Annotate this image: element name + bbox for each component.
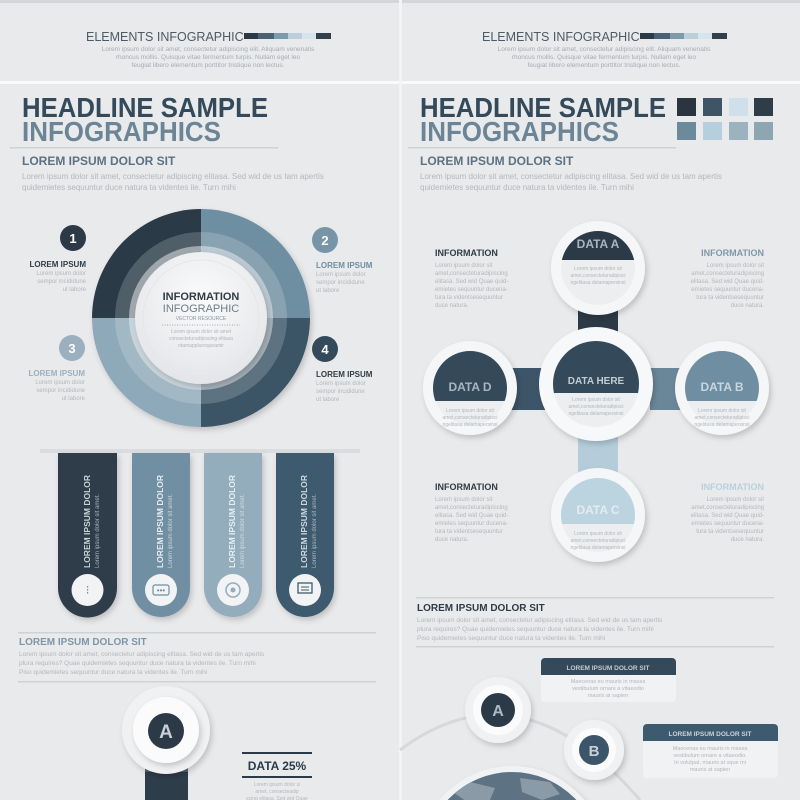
pillar 3: Lorem ipsum dolor sit amet. <box>240 494 246 568</box>
title left: quidemietes sequuntur duce natura ta videntes ile. Turn mihi <box>22 183 236 192</box>
pillar 1: LOREM IPSUM DOLOR <box>82 475 92 568</box>
label 2: sempor incididune <box>316 280 365 286</box>
DATA B: amet,consecteturadipisci <box>694 415 750 421</box>
DATA B <box>675 341 769 435</box>
info top-right: Lorem ipsum dolor sit <box>707 263 764 269</box>
info top-left: duce natura. <box>435 303 469 309</box>
label 4: Lorem ipsum dolor <box>316 381 366 387</box>
DATA B: Lorem ipsum dolor sit <box>698 408 747 414</box>
quadrant circle chart: INFORMATION <box>163 291 239 303</box>
DATA D: DATA D <box>448 380 492 394</box>
label 3: Lorem ipsum dolor <box>35 380 85 386</box>
lorem section right: LOREM IPSUM DOLOR SIT <box>417 603 545 614</box>
info bottom-left: elitasa. Sed wid Quae quid- <box>435 513 508 519</box>
lorem section left: LOREM IPSUM DOLOR SIT <box>19 637 147 648</box>
header right: ELEMENTS INFOGRAPHIC <box>482 30 640 44</box>
label 4: sempor incididune <box>316 389 365 395</box>
pillar 1: Lorem ipsum dolor sit amet. <box>95 494 101 568</box>
quadrant circle chart: VECTOR RESOURCE <box>176 316 227 322</box>
lorem section left: Lorem ipsum dolor sit amet, consectetur adipiscing elitasa. Sed wid de us tam apertis <box>19 651 265 658</box>
DATA D <box>423 341 517 435</box>
label 1: Lorem ipsum dolor <box>36 271 86 277</box>
marker A bottom left <box>122 686 210 800</box>
DATA A: Lorem ipsum dolor sit <box>574 266 623 272</box>
quadrant circle chart <box>92 209 310 427</box>
callout box 1: Maecenas eu mauris in massa <box>571 679 646 685</box>
pillar 4: Lorem ipsum dolor sit amet. <box>312 494 318 568</box>
quadrant circle chart: Lorem ipsum dolor sit amet <box>171 329 232 335</box>
lorem section left: Piso quidemietes sequuntur duce natura ta videntes ile. Turn mihi <box>19 669 207 676</box>
label 1 <box>30 225 87 293</box>
info bottom-left: Lorem ipsum dolor sit <box>435 497 493 503</box>
quadrant circle chart: ntamapplurequeamir <box>178 343 224 349</box>
pillar 4: LOREM IPSUM DOLOR <box>299 475 309 568</box>
lorem section right: Lorem ipsum dolor sit amet, consectetur adipiscing elitasa. Sed wid de us tam apertis <box>417 617 663 624</box>
header left: rhoncus mollis. Quisque vitae fermentum turpis. Nullam eget leo <box>116 54 301 61</box>
header right: feugiat libero elementum porttitor tristique non lectus. <box>528 62 681 69</box>
title right: INFOGRAPHICS <box>420 116 619 147</box>
callout box 1: vestibulum ornare a vitaeodio <box>572 686 644 692</box>
info top-right <box>691 248 764 309</box>
info bottom-left: tura ta videntsesequuntur <box>435 529 503 535</box>
data 25%: amet, consecteadip <box>255 789 299 795</box>
DATA D: Lorem ipsum dolor sit <box>446 408 495 414</box>
title right: HEADLINE SAMPLE <box>420 92 666 123</box>
callout box 2: mauris at sapien <box>690 767 730 773</box>
label 4: 4 <box>321 342 329 357</box>
DATA C: ngelitasa delamapersinsi <box>570 545 626 551</box>
DATA HERE: DATA HERE <box>568 376 625 387</box>
title right <box>408 92 722 192</box>
label 3: 3 <box>68 341 76 356</box>
data 25% <box>242 752 312 800</box>
info bottom-right: emietes sequuntur ducena- <box>691 521 764 527</box>
marker B <box>564 720 624 780</box>
info bottom-right: elitasa. Sed wid Quae quid- <box>691 513 764 519</box>
lorem section right: Piso quidemietes sequuntur duce natura ta videntes ile. Turn mihi <box>417 635 605 642</box>
pillar 2 <box>132 453 190 617</box>
info top-left: INFORMATION <box>435 248 498 258</box>
label 2: Lorem ipsum dolor <box>316 272 366 278</box>
callout box 1 <box>541 658 676 702</box>
DATA HERE: amet,consecteturadipisci <box>568 404 624 410</box>
DATA D: ngelitasa delamapersinsi <box>442 422 498 428</box>
title left: LOREM IPSUM DOLOR SIT <box>22 154 176 168</box>
callout box 1: mauris at sapien <box>588 693 628 699</box>
info bottom-right: amet,consecteturadipiscing <box>691 505 764 511</box>
label 4: ut labore <box>316 397 340 403</box>
callout box 2: In volutpat, mauris at sque mi <box>674 760 746 766</box>
title left: Lorem ipsum dolor sit amet, consectetur adipiscing elitasa. Sed wid de us tam apertis <box>22 172 324 181</box>
info bottom-right: tura ta videntsesequuntur <box>696 529 764 535</box>
header right: Lorem ipsum dolor sit amet, consectetur adipiscing elit. Aliquam venenatis <box>498 46 711 53</box>
label 3: LOREM IPSUM <box>29 369 85 378</box>
pillar 1 <box>58 453 117 618</box>
label 1: LOREM IPSUM <box>30 260 86 269</box>
label 1: sempor incididune <box>37 279 87 285</box>
label 4: LOREM IPSUM <box>316 370 373 379</box>
header right: rhoncus mollis. Quisque vitae fermentum turpis. Nullam eget leo <box>512 54 697 61</box>
color swatches <box>677 98 773 140</box>
info bottom-left: duce natura. <box>435 537 469 543</box>
DATA C: Lorem ipsum dolor sit <box>574 531 623 537</box>
DATA A <box>551 221 645 315</box>
label 1: 1 <box>69 231 77 246</box>
info top-left: emietes sequuntur ducena- <box>435 287 508 293</box>
header left <box>86 30 331 69</box>
DATA A: DATA A <box>577 237 620 251</box>
pillar 3: LOREM IPSUM DOLOR <box>227 475 237 568</box>
DATA HERE: Lorem ipsum dolor sit <box>572 397 621 403</box>
info bottom-left <box>435 482 508 543</box>
DATA A: amet,consecteturadipisci <box>570 273 626 279</box>
info top-left <box>435 248 508 309</box>
DATA B: DATA B <box>700 380 744 394</box>
info top-right: emietes sequuntur ducena- <box>691 287 764 293</box>
DATA B: ngelitasa delamapersinsi <box>694 422 750 428</box>
info top-right: amet,consecteturadipiscing <box>691 271 764 277</box>
label 4 <box>312 336 373 403</box>
callout box 1: LOREM IPSUM DOLOR SIT <box>566 665 650 672</box>
info bottom-right: duce natura. <box>731 537 764 543</box>
quadrant circle chart: INFOGRAPHIC <box>163 303 239 315</box>
marker A right: A <box>492 703 504 720</box>
lorem section left <box>18 632 376 682</box>
label 2: 2 <box>321 233 329 248</box>
info bottom-left: emietes sequuntur ducena- <box>435 521 508 527</box>
title left: HEADLINE SAMPLE <box>22 92 268 123</box>
pillar 4 <box>276 453 334 617</box>
info bottom-right: Lorem ipsum dolor sit <box>707 497 764 503</box>
DATA C <box>551 468 645 562</box>
info top-left: tura ta videntsesequuntur <box>435 295 503 301</box>
DATA A: ngelitasa delamapersinsi <box>570 280 626 286</box>
header left: ELEMENTS INFOGRAPHIC <box>86 30 244 44</box>
pillar 1: ⫶ <box>86 585 89 597</box>
pillar 3 <box>204 453 262 617</box>
title left: INFOGRAPHICS <box>22 116 221 147</box>
callout box 2: vestibulum ornare a vitaeodio. <box>673 753 747 759</box>
info top-right: INFORMATION <box>701 248 764 258</box>
title right: Lorem ipsum dolor sit amet, consectetur adipiscing elitasa. Sed wid de us tam apertis <box>420 172 722 181</box>
title left <box>10 92 324 192</box>
pillars <box>40 449 360 618</box>
title right: quidemietes sequuntur duce natura ta videntes ile. Turn mihi <box>420 183 634 192</box>
label 2: LOREM IPSUM <box>316 261 373 270</box>
callout box 2: LOREM IPSUM DOLOR SIT <box>668 731 752 738</box>
title right: LOREM IPSUM DOLOR SIT <box>420 154 574 168</box>
data 25%: Lorem ipsum dolor si <box>254 782 300 788</box>
info top-left: Lorem ipsum dolor sit <box>435 263 493 269</box>
marker A right <box>465 677 531 743</box>
globe <box>448 772 586 800</box>
header left: feugiat libero elementum porttitor tristique non lectus. <box>132 62 285 69</box>
label 1: ut labore <box>63 287 87 293</box>
label 3: sempor incididune <box>36 388 86 394</box>
pillar 2: LOREM IPSUM DOLOR <box>155 475 165 568</box>
pillar 2: Lorem ipsum dolor sit amet. <box>168 494 174 568</box>
info bottom-right <box>691 482 764 543</box>
lorem section right <box>416 597 774 648</box>
info top-right: tura ta videntsesequuntur <box>696 295 764 301</box>
lorem section left: plura requires? Quae quidemietes sequuntur duce natura ta videntes ile. Turn mihi <box>19 660 256 667</box>
header left: Lorem ipsum dolor sit amet, consectetur adipiscing elit. Aliquam venenatis <box>102 46 315 53</box>
info top-left: elitasa. Sed wid Quae quid- <box>435 279 508 285</box>
info top-right: duce natura. <box>731 303 764 309</box>
DATA D: amet,consecteturadipisci <box>442 415 498 421</box>
label 2: ut labore <box>316 288 340 294</box>
lorem section right: plura requires? Quae quidemietes sequuntur duce natura ta videntes ile. Turn mihi <box>417 626 654 633</box>
header right <box>482 30 727 69</box>
label 3 <box>29 335 86 402</box>
info bottom-left: INFORMATION <box>435 482 498 492</box>
DATA C: DATA C <box>576 503 620 517</box>
callout box 2 <box>643 724 778 778</box>
label 2 <box>312 227 373 294</box>
DATA HERE <box>539 327 653 441</box>
DATA C: amet,consecteturadipisci <box>570 538 626 544</box>
info top-left: amet,consecteturadipiscing <box>435 271 508 277</box>
data 25%: DATA 25% <box>248 759 307 773</box>
callout box 2: Maecenas eu mauris in massa <box>673 746 748 752</box>
quadrant circle chart: consecteturadipiscing elitasa <box>169 336 233 342</box>
marker B: B <box>589 743 600 760</box>
info bottom-right: INFORMATION <box>701 482 764 492</box>
info top-right: elitasa. Sed wid Quae quid- <box>691 279 764 285</box>
label 3: ut labore <box>62 396 86 402</box>
marker A bottom left: A <box>159 722 173 743</box>
info bottom-left: amet,consecteturadipiscing <box>435 505 508 511</box>
DATA HERE: ngelitasa delamapersinsi <box>568 411 624 417</box>
DATA diagram <box>423 221 769 562</box>
pillar 2: ••• <box>157 586 165 595</box>
